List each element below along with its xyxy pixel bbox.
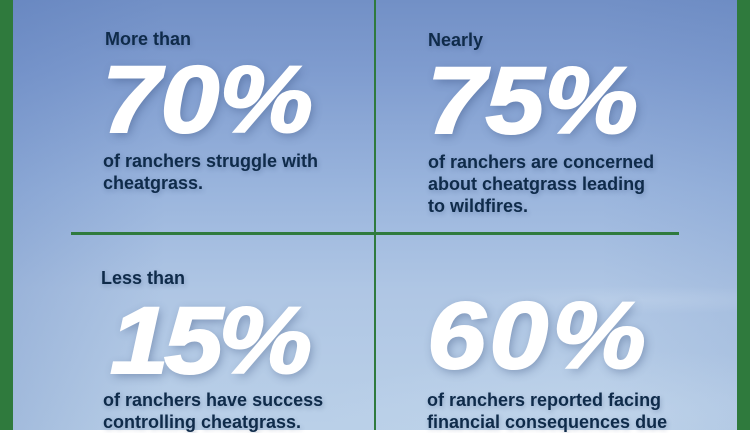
horizontal divider <box>71 232 679 235</box>
big number 60%: 60% <box>427 283 650 389</box>
vertical divider <box>374 0 376 430</box>
right green border <box>737 0 750 430</box>
description <box>103 151 319 196</box>
description <box>428 152 655 216</box>
big number 15%: 15% <box>110 288 308 394</box>
panel: more than 70% <box>102 29 319 196</box>
big number 70%: 70% <box>102 47 313 153</box>
lead text: Less than <box>101 268 185 288</box>
description: of ranchers struggle with <box>103 151 318 171</box>
description: about cheatgrass leading <box>428 174 645 194</box>
lead text: Nearly <box>428 30 483 50</box>
panel: 60% <box>427 283 668 433</box>
description: of ranchers are concerned <box>428 152 654 172</box>
panel: nearly 75% <box>427 30 655 216</box>
description <box>103 390 324 433</box>
description <box>427 390 668 433</box>
panel: less than 15% <box>101 268 324 433</box>
description: of ranchers reported facing <box>427 390 661 410</box>
description: controlling cheatgrass. <box>103 412 301 432</box>
description: financial consequences due <box>427 412 667 432</box>
lead text: More than <box>105 29 191 49</box>
description: to wildfires. <box>428 196 528 216</box>
description: cheatgrass. <box>103 173 203 193</box>
description: of ranchers have success <box>103 390 323 410</box>
left green border <box>0 0 13 430</box>
big number 75%: 75% <box>427 48 638 154</box>
